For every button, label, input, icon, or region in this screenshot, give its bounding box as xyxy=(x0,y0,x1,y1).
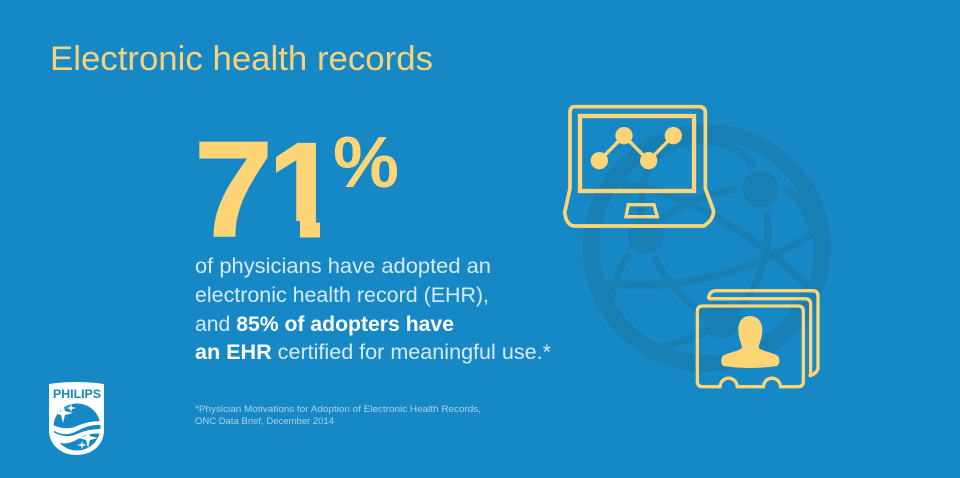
footnote: ONC Data Brief, December 2014 xyxy=(195,416,334,427)
icon: background globe xyxy=(591,132,822,364)
big statistic: 71 percent: 1 xyxy=(265,114,341,266)
logo: Philips shield: PHILIPS xyxy=(53,389,101,401)
title: Electronic health records xyxy=(50,40,433,78)
body text: of physicians have adopted an xyxy=(195,255,491,278)
footnote xyxy=(195,404,481,427)
body text: an EHR certified for meaningful use.* xyxy=(195,341,551,364)
big statistic: 71 percent: 7 xyxy=(194,113,273,265)
body text: electronic health record (EHR), xyxy=(195,284,489,307)
logo: Philips shield xyxy=(49,382,104,455)
big statistic: 71 percent xyxy=(199,136,398,238)
body text: and 85% of adopters have xyxy=(195,313,454,336)
icon: laptop with line chart xyxy=(565,107,713,226)
icon: stacked profile cards xyxy=(697,291,818,387)
body text xyxy=(195,255,551,364)
big statistic: 71 percent: % xyxy=(333,123,399,203)
footnote: *Physician Motivations for Adoption of Electronic Health Records, xyxy=(195,404,481,415)
